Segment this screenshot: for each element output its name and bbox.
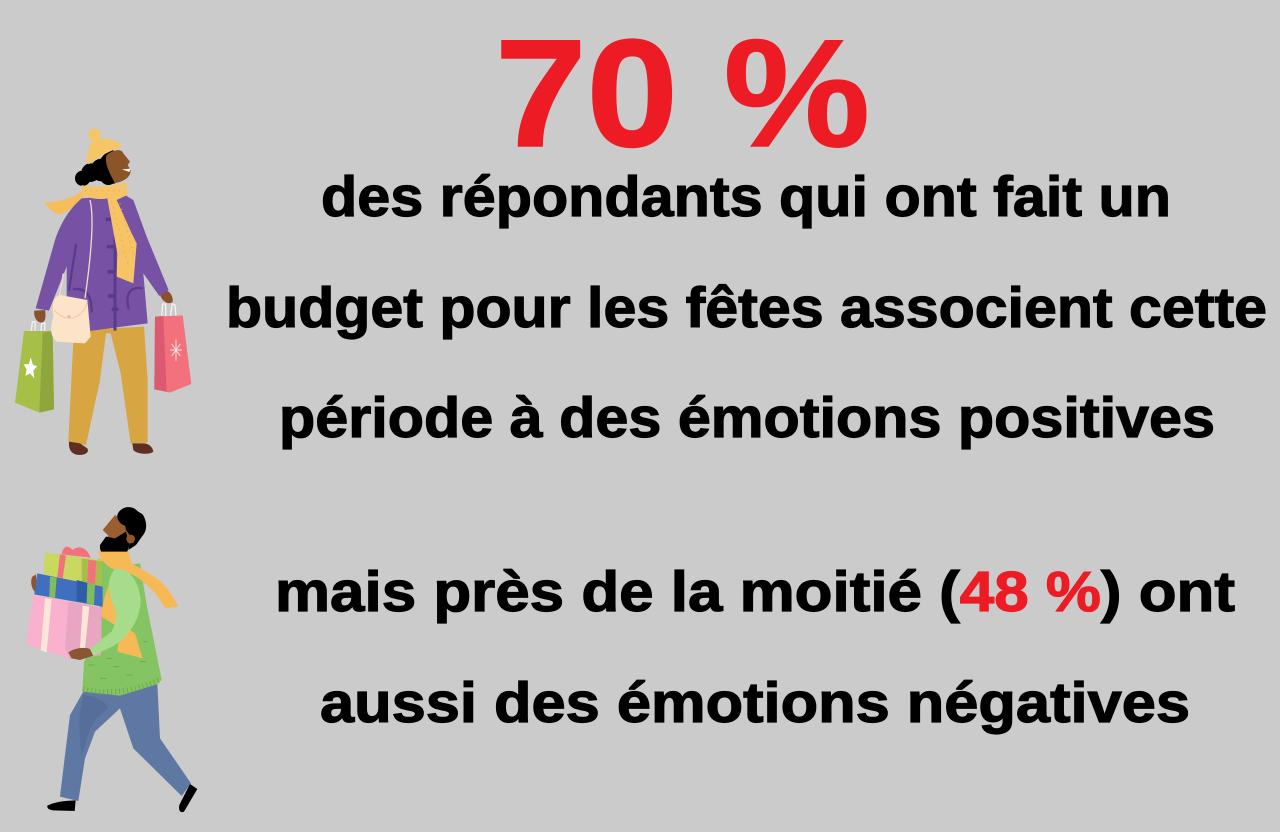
icon: woman with shopping bags — [15, 129, 191, 455]
text block: positive emotions: période à des émotions positives — [279, 386, 1215, 450]
text block: negative emotions: aussi des émotions négatives — [320, 671, 1190, 735]
title: 70 %: 70 % — [495, 8, 870, 179]
text block: positive emotions: des répondants qui ont fait un — [321, 165, 1171, 229]
text block: positive emotions: budget pour les fêtes associent cette — [226, 276, 1267, 340]
text block: negative emotions — [275, 560, 1235, 735]
icon: man carrying gifts — [26, 507, 197, 812]
text block: positive emotions — [226, 165, 1267, 450]
text block: negative emotions: mais près de la moitié ( 48 %) ont — [275, 560, 1235, 624]
